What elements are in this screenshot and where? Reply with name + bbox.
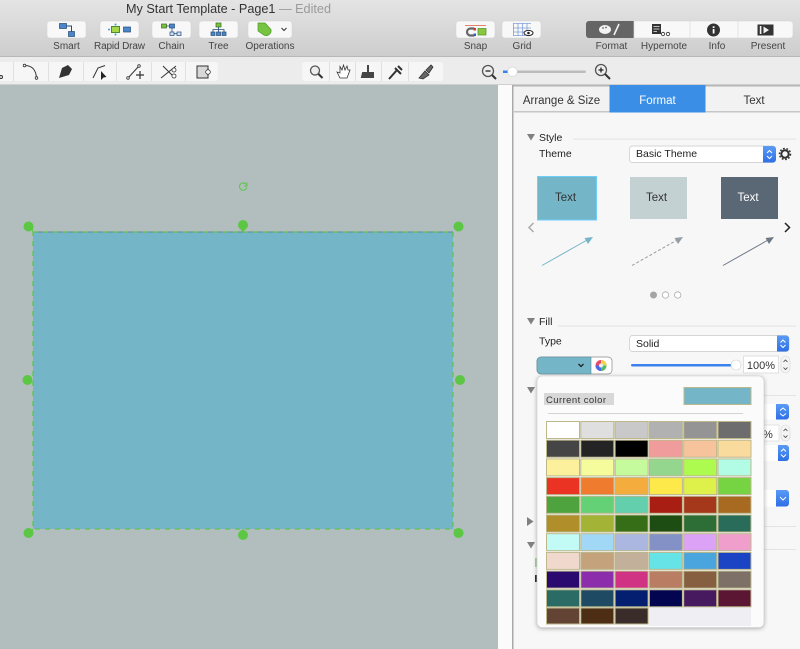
theme swatch 3: Text	[737, 192, 759, 204]
scroller gutter	[498, 85, 514, 649]
current color row: Current color	[546, 395, 606, 406]
theme swatch 3	[721, 177, 778, 219]
fill type dropdown: Solid	[636, 338, 660, 350]
button: Operations	[246, 21, 294, 52]
style section	[527, 132, 796, 298]
color swatch grid	[546, 422, 751, 626]
canvas	[0, 85, 498, 649]
fill section: Fill	[539, 316, 552, 328]
line style 2	[632, 237, 683, 266]
tab: Info: Info	[709, 41, 726, 52]
tab: Present: Present	[751, 41, 785, 52]
style section: Theme	[539, 148, 572, 160]
current color row	[544, 388, 751, 414]
segmented control: Format, Hypernote, Info, Present	[586, 21, 793, 52]
zoom slider	[482, 64, 610, 79]
carousel arrows	[529, 223, 790, 232]
tab: Info	[707, 24, 726, 52]
button: Grid: Grid	[513, 41, 531, 52]
controls partly hidden behind popup	[527, 387, 796, 582]
theme dropdown	[630, 146, 776, 162]
rotation handle	[240, 182, 247, 190]
button: Tree	[199, 21, 238, 52]
panel tabs	[514, 85, 800, 112]
title bar and main toolbar	[0, 0, 800, 57]
color picker popup	[537, 376, 764, 628]
opacity field: 100%	[747, 360, 775, 372]
tab: Format: Format	[596, 41, 628, 52]
button: Chain: Chain	[158, 41, 185, 52]
document title: My Start Template - Page1 — Edited	[126, 2, 331, 16]
button: Snap: Snap	[464, 41, 488, 52]
line style 1	[542, 237, 593, 266]
theme swatch 1: Text	[555, 192, 577, 204]
style section: Style	[539, 132, 563, 144]
tab: Present	[751, 24, 785, 52]
button: Smart: Smart	[53, 41, 80, 52]
panel tabs: Format	[639, 95, 677, 107]
button: Rapid Draw	[94, 21, 146, 52]
tab: Hypernote: Hypernote	[641, 41, 688, 52]
theme swatch 2: Text	[646, 192, 668, 204]
theme swatch 1	[538, 176, 596, 220]
line style 3	[723, 237, 774, 266]
pagination dots	[650, 292, 681, 298]
secondary toolbar	[0, 57, 800, 85]
button: Snap	[456, 21, 495, 52]
fill section: Type	[539, 336, 562, 348]
button: Tree: Tree	[208, 41, 229, 52]
button: Rapid Draw: Rapid Draw	[94, 41, 146, 52]
opacity slider	[631, 360, 741, 370]
controls partly hidden behind popup: %	[763, 429, 773, 441]
button: Operations: Operations	[246, 41, 294, 52]
fill type dropdown	[630, 336, 789, 352]
fill section	[527, 316, 796, 374]
theme swatch 2	[630, 177, 687, 219]
tab: Hypernote	[641, 24, 688, 52]
panel tabs: Arrange & Size	[523, 95, 600, 107]
icon: gear	[780, 148, 790, 160]
theme dropdown: Basic Theme	[636, 148, 697, 160]
button: Grid	[502, 21, 541, 52]
color well button	[537, 357, 612, 374]
opacity field	[744, 356, 790, 373]
view tools group	[302, 62, 443, 81]
selected blue rectangle	[33, 232, 453, 529]
panel tabs: Text	[743, 95, 765, 107]
tab: Format	[586, 21, 634, 52]
selection handles	[22, 220, 465, 540]
format side panel	[514, 85, 800, 649]
button: Smart	[47, 21, 86, 52]
button: Chain	[152, 21, 191, 52]
drawing tools group	[0, 62, 218, 81]
